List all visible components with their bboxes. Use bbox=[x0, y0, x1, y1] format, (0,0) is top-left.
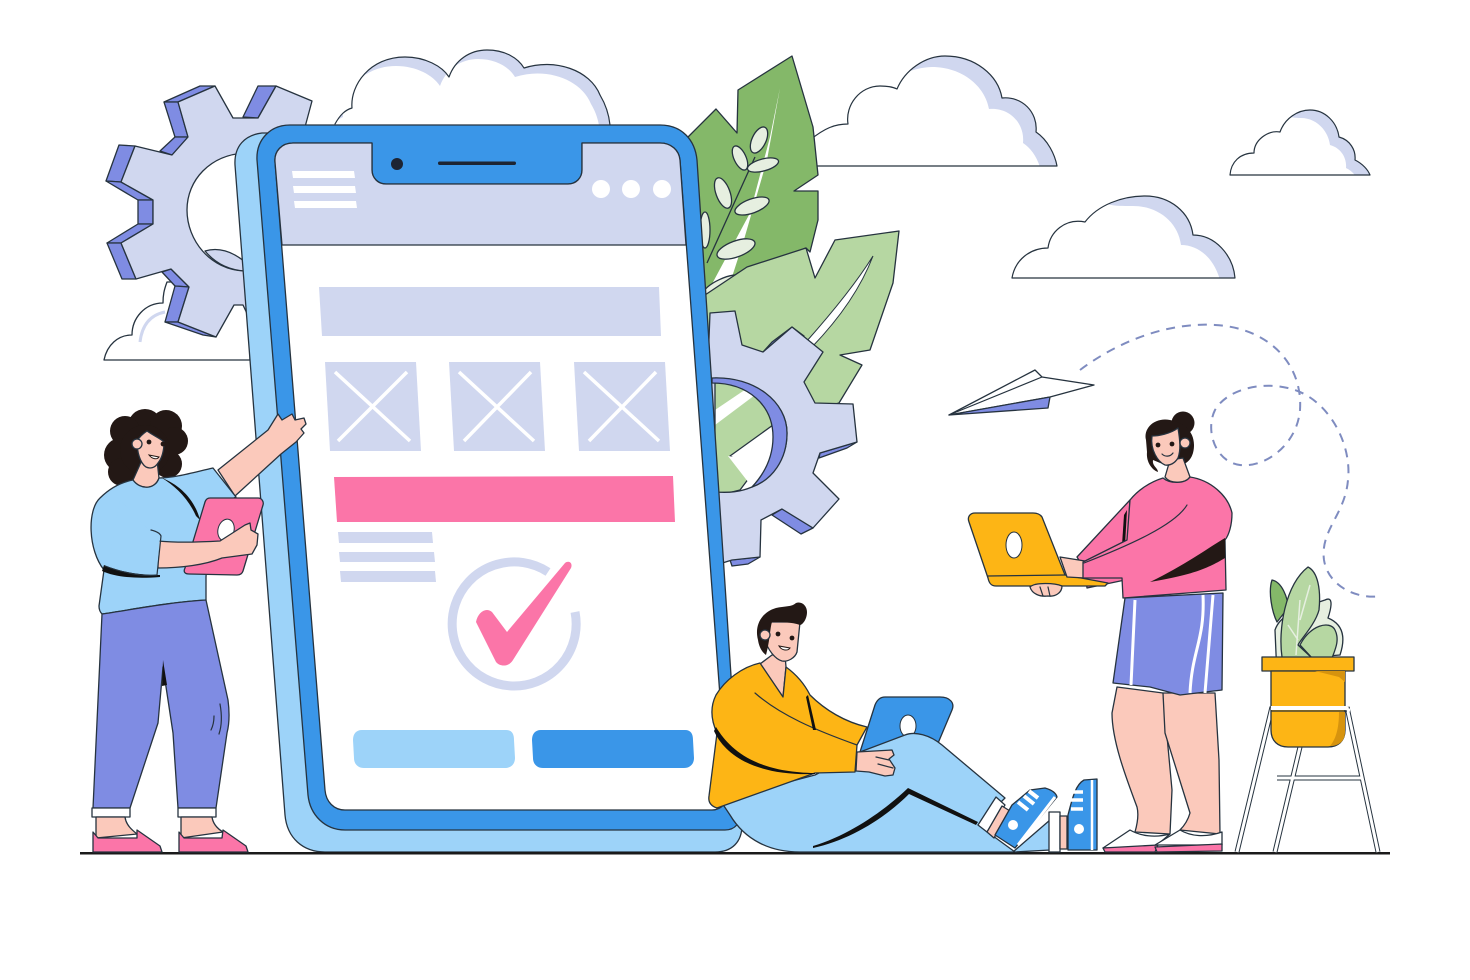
sweater bbox=[1083, 477, 1232, 598]
socks bbox=[978, 797, 1067, 852]
phone header bbox=[275, 143, 686, 245]
skirt bbox=[1113, 593, 1223, 695]
gear side faces bbox=[106, 86, 276, 337]
face bbox=[1152, 428, 1180, 465]
hair bbox=[757, 603, 807, 655]
shoe: near bbox=[995, 788, 1057, 848]
pale leaf bbox=[1275, 599, 1343, 700]
button: dark bbox=[532, 730, 694, 768]
gear: left bbox=[106, 86, 312, 337]
sprig of pale leaves bbox=[700, 124, 780, 299]
central leaf bbox=[1281, 567, 1320, 658]
skirt stripes bbox=[1131, 595, 1213, 693]
notch camera and speaker bbox=[391, 158, 516, 170]
dashed flight path bbox=[1080, 325, 1382, 597]
sweater details bbox=[755, 693, 857, 745]
potted plant bbox=[1262, 567, 1354, 747]
strap bbox=[1150, 538, 1225, 582]
forearm and hand bbox=[158, 523, 258, 568]
neck bbox=[1165, 458, 1190, 482]
raised arm bbox=[218, 414, 306, 496]
phone body bbox=[235, 133, 742, 852]
gear front face bbox=[700, 311, 857, 570]
sleeve bbox=[108, 500, 160, 574]
person: man with laptop bbox=[709, 603, 1097, 852]
phone bbox=[235, 125, 742, 852]
strap bbox=[102, 478, 200, 578]
gear side faces bbox=[763, 327, 804, 352]
ankles bbox=[96, 817, 137, 838]
trousers bbox=[93, 600, 229, 808]
paper plane bbox=[949, 370, 1094, 415]
ground line bbox=[80, 852, 1390, 854]
cloud: far right small bbox=[1229, 109, 1371, 176]
laptop bbox=[968, 513, 1108, 586]
illustration scene bbox=[80, 49, 1390, 854]
shoe: far bbox=[1068, 779, 1097, 850]
hand under laptop bbox=[1030, 584, 1062, 596]
hand on laptop bbox=[1060, 557, 1085, 578]
cloud: top centre bbox=[334, 49, 610, 124]
leaf: dark green bbox=[688, 56, 818, 300]
back arm bbox=[1077, 500, 1130, 588]
pink bar bbox=[334, 476, 675, 522]
gear: right bbox=[700, 311, 857, 570]
pot rim bbox=[1262, 657, 1354, 671]
legs bbox=[1112, 687, 1172, 834]
leaf vein bbox=[712, 88, 780, 284]
cloud: left behind gear bbox=[104, 282, 250, 360]
gear front face bbox=[121, 86, 312, 337]
phone screen bbox=[275, 143, 727, 810]
laptop bbox=[860, 697, 953, 752]
check mark badge bbox=[452, 562, 576, 686]
face bbox=[137, 431, 164, 468]
pot shade bbox=[1315, 671, 1345, 682]
cloud: right middle bbox=[1011, 195, 1236, 279]
shirt bbox=[91, 468, 236, 614]
dark leaf bbox=[1270, 580, 1288, 622]
head bbox=[765, 622, 800, 661]
leaf: light green bbox=[700, 231, 899, 500]
stand top rail over pot bbox=[1271, 706, 1347, 710]
gear inner ring bbox=[712, 378, 787, 487]
hair bbox=[104, 409, 188, 486]
person: woman with tablet bbox=[91, 409, 306, 852]
small leaf bbox=[1300, 625, 1337, 658]
hand bbox=[856, 750, 895, 776]
phone frame bbox=[257, 125, 740, 830]
legs bbox=[720, 733, 1050, 852]
light leaf vein bbox=[806, 256, 873, 347]
text lines bbox=[338, 532, 436, 582]
shoes bbox=[93, 830, 162, 852]
button: light bbox=[353, 730, 515, 768]
sweater fold bbox=[1084, 505, 1187, 563]
cloud: top right large bbox=[814, 55, 1058, 167]
neck bbox=[133, 460, 159, 487]
person: woman with laptop bbox=[968, 412, 1232, 852]
tablet bbox=[184, 498, 263, 575]
shoes bbox=[1103, 830, 1222, 852]
sweater bbox=[709, 663, 867, 808]
menu icon bbox=[292, 171, 357, 208]
form title bar bbox=[319, 287, 661, 336]
pot body bbox=[1271, 671, 1345, 747]
gear hole bbox=[187, 153, 245, 271]
hair back and bun bbox=[1146, 412, 1194, 472]
header dots bbox=[592, 180, 671, 198]
plant stand bbox=[1237, 707, 1378, 852]
trouser cuffs bbox=[92, 808, 216, 817]
neck bbox=[760, 655, 786, 697]
image placeholders bbox=[325, 362, 670, 451]
